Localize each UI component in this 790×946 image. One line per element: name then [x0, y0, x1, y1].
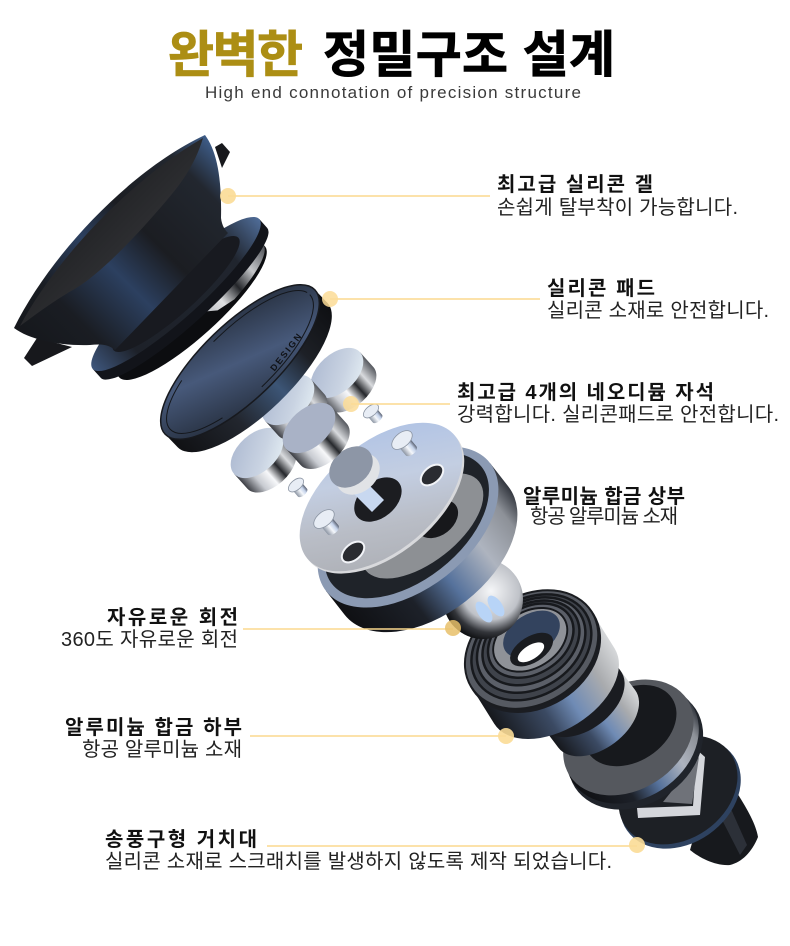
callout 5 text	[61, 606, 238, 651]
part: suction cup	[14, 135, 230, 366]
callout 3 text: 최고급 4개의 네오디뮴 자석	[457, 381, 714, 404]
title: 정밀구조 설계	[323, 27, 615, 83]
callout 1: silicone gel leader	[220, 188, 490, 204]
part: threaded collar	[442, 566, 639, 761]
callout 7 text: 송풍구형 거치대	[105, 828, 257, 851]
subtitle: High end connotation of precision structure	[205, 83, 581, 102]
title	[168, 27, 615, 83]
product: exploded phone mount	[14, 135, 762, 872]
part: neodymium magnets	[221, 338, 385, 502]
callout 2: silicone pad leader	[322, 291, 540, 307]
callout 3: magnets leader	[343, 396, 450, 412]
callout 7: vent clip leader	[267, 837, 645, 853]
callout 1 text: 최고급 실리콘 겔	[497, 173, 653, 196]
part: silicone pad	[139, 262, 354, 475]
part: vent clip fins	[690, 793, 758, 865]
part: clip head	[597, 713, 762, 872]
part: silicone pad: DESIGN	[268, 330, 305, 373]
callout 4 text: 항공 알루미늄 소재	[530, 505, 678, 528]
callout 6 text	[65, 716, 242, 761]
part: aluminium plate	[273, 394, 491, 602]
callout 2 text: 실리콘 패드	[547, 277, 655, 300]
callout 1 text: 손쉽게 탈부착이 가능합니다.	[497, 196, 738, 219]
part: aluminium housing	[288, 414, 548, 665]
callout 5 text: 360도 자유로운 회전	[61, 628, 238, 651]
callout 1 text	[497, 173, 738, 219]
callout 7 text: 실리콘 소재로 스크래치를 발생하지 않도록 제작 되었습니다.	[105, 850, 612, 873]
part: centre post	[321, 438, 388, 512]
callout 2 text: 실리콘 소재로 안전합니다.	[547, 299, 769, 322]
callout 5 text: 자유로운 회전	[107, 606, 238, 629]
callout 3 text: 강력합니다. 실리콘패드로 안전합니다.	[457, 403, 779, 426]
callout 4 text	[523, 485, 685, 528]
callout 6: lower housing leader	[250, 728, 514, 744]
part: loose screws	[286, 401, 386, 501]
callout 4 text: 알루미늄 합금 상부	[523, 485, 685, 508]
part: plate screws	[310, 427, 423, 541]
callout 6 text: 알루미늄 합금 하부	[65, 716, 242, 739]
part: ball joint	[443, 559, 523, 639]
callout 5: rotation leader	[243, 620, 461, 636]
callout 6 text: 항공 알루미늄 소재	[82, 738, 242, 761]
callout 7 text	[105, 828, 612, 873]
callout 2 text	[547, 277, 769, 322]
title: 완벽한	[168, 27, 303, 83]
part: shaft	[537, 661, 653, 772]
callout 3 text	[457, 381, 779, 426]
part: flange ring	[540, 655, 726, 835]
part: cup base disk	[77, 201, 292, 405]
